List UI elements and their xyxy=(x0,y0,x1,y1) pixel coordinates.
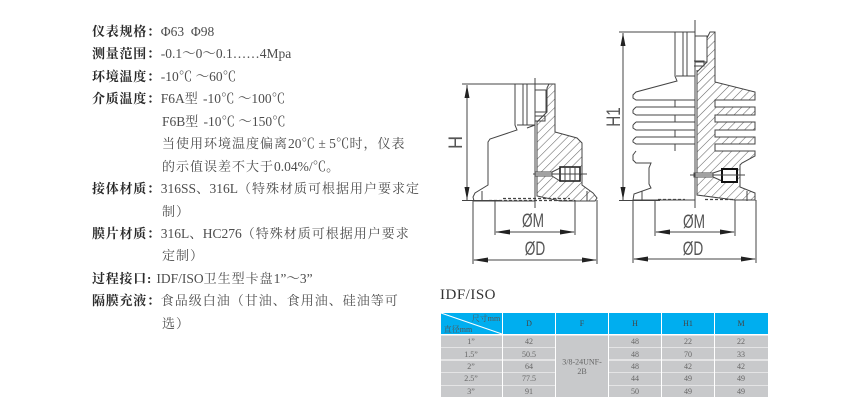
row 2 inch xyxy=(467,362,745,371)
flange ticks, finned gauge xyxy=(642,191,747,201)
H1 dimension: H1 xyxy=(602,107,624,127)
OM dimension, finned gauge: ØM xyxy=(683,211,705,233)
row 1.5 inch: 70 xyxy=(684,350,692,359)
row 2.5 inch: 44 xyxy=(631,374,639,383)
row 1.5 inch: 50.5 xyxy=(522,350,536,359)
left outline, short gauge xyxy=(473,84,535,201)
row 2 inch: 2” xyxy=(467,362,475,371)
row 2 inch: 42 xyxy=(684,362,692,371)
OM dimension, finned gauge xyxy=(655,200,735,236)
row 3 inch xyxy=(467,387,745,396)
row 3 inch: 3” xyxy=(467,387,475,396)
row 1 inch: 1” xyxy=(467,337,475,346)
row 1 inch: 48 xyxy=(631,337,639,346)
OD dimension, finned gauge: ØD xyxy=(683,238,703,260)
table header: D xyxy=(526,319,532,328)
merged F cell: 2B xyxy=(577,367,587,376)
row 2 inch: 64 xyxy=(525,362,533,371)
table header xyxy=(441,313,768,334)
row 2.5 inch: 49 xyxy=(737,374,745,383)
table header: 直径mm xyxy=(444,324,473,334)
spec: medium temperature F6B: F6B型 -10℃ ～150℃ xyxy=(162,114,286,129)
hatched right half, short gauge xyxy=(537,84,597,201)
table header: F xyxy=(580,319,585,328)
left outline, finned gauge xyxy=(633,32,695,200)
spec: diaphragm fill fluid: 隔膜充液：食品级白油（甘油、食用油、硅油等可 xyxy=(92,293,399,308)
row 2.5 inch xyxy=(464,374,745,383)
merged F cell: 3/8-24UNF- xyxy=(562,358,602,366)
spec: process connection: 过程接口: IDF/ISO卫生型卡盘1”～3” xyxy=(92,271,313,286)
panel: specification list xyxy=(92,24,420,331)
H1 dimension xyxy=(602,32,678,200)
row 2 inch: 48 xyxy=(631,362,639,371)
process port, finned gauge xyxy=(676,32,707,200)
merged F cell xyxy=(562,358,602,376)
row 1 inch: 22 xyxy=(737,337,745,346)
centre line, finned gauge xyxy=(694,20,696,208)
row 1.5 inch: 48 xyxy=(631,350,639,359)
row 2 inch: 42 xyxy=(737,362,745,371)
row 1 inch: 42 xyxy=(525,337,533,346)
spec: connection material line 2: 制） xyxy=(162,204,190,219)
H dimension xyxy=(445,84,520,200)
row 1.5 inch: 1.5” xyxy=(464,350,478,359)
row 1.5 inch xyxy=(464,350,745,359)
table header: 尺寸mm xyxy=(472,313,501,323)
table header: M xyxy=(737,319,745,328)
spec: temperature error note line 2: 的示值误差不大于0.04%/℃。 xyxy=(162,159,340,174)
OD dimension, finned gauge xyxy=(633,200,756,263)
row 2.5 inch: 77.5 xyxy=(522,374,536,383)
table header: H xyxy=(632,319,638,328)
fill screw, finned gauge xyxy=(690,169,745,182)
flange ticks, short gauge xyxy=(482,191,587,201)
diaphragm serrations, short gauge xyxy=(489,198,575,200)
spec: diaphragm material: 膜片材质：316L、HC276（特殊材质可根据用户要求 xyxy=(92,226,410,241)
row 1.5 inch: 33 xyxy=(737,350,745,359)
spec: medium temperature F6A: 介质温度：F6A型 -10℃ ～100℃ xyxy=(92,91,285,106)
row 1 inch: 22 xyxy=(684,337,692,346)
spec: diaphragm fill fluid line 2: 选） xyxy=(162,316,190,331)
H dimension: H xyxy=(445,136,466,149)
diaphragm serrations, finned gauge xyxy=(658,198,733,200)
spec: diaphragm material line 2: 定制） xyxy=(162,248,204,263)
row 3 inch: 91 xyxy=(525,387,533,396)
row 3 inch: 49 xyxy=(684,387,692,396)
spec: instrument size: 仪表规格：Φ63 Φ98 xyxy=(92,24,214,39)
spec: measuring range: 测量范围：-0.1～0～0.1……4Mpa xyxy=(92,46,291,61)
row 2.5 inch: 2.5” xyxy=(464,374,478,383)
table row backgrounds xyxy=(441,336,768,397)
OM dimension, short gauge: ØM xyxy=(522,210,544,232)
process port, short gauge xyxy=(535,84,555,200)
centre line, short gauge xyxy=(534,78,536,208)
spec: temperature error note line 1: 当使用环境温度偏离20℃ ± 5℃时，仪表 xyxy=(162,136,405,151)
OD dimension, short gauge: ØD xyxy=(525,238,545,260)
row 2.5 inch: 49 xyxy=(684,374,692,383)
spec: ambient temperature: 环境温度：-10℃ ～60℃ xyxy=(92,69,236,84)
fill screw, short gauge xyxy=(533,167,587,181)
OM dimension, short gauge xyxy=(495,200,575,235)
row 1 inch xyxy=(467,337,745,346)
OD dimension, short gauge xyxy=(473,200,597,264)
hatched right half, finned gauge xyxy=(697,32,755,200)
row 3 inch: 49 xyxy=(737,387,745,396)
table title: IDF/ISO xyxy=(440,287,496,303)
table header: H1 xyxy=(683,319,693,328)
row 3 inch: 50 xyxy=(631,387,639,396)
spec: connection material: 接体材质：316SS、316L（特殊材质可根据用户要求定 xyxy=(92,181,420,196)
